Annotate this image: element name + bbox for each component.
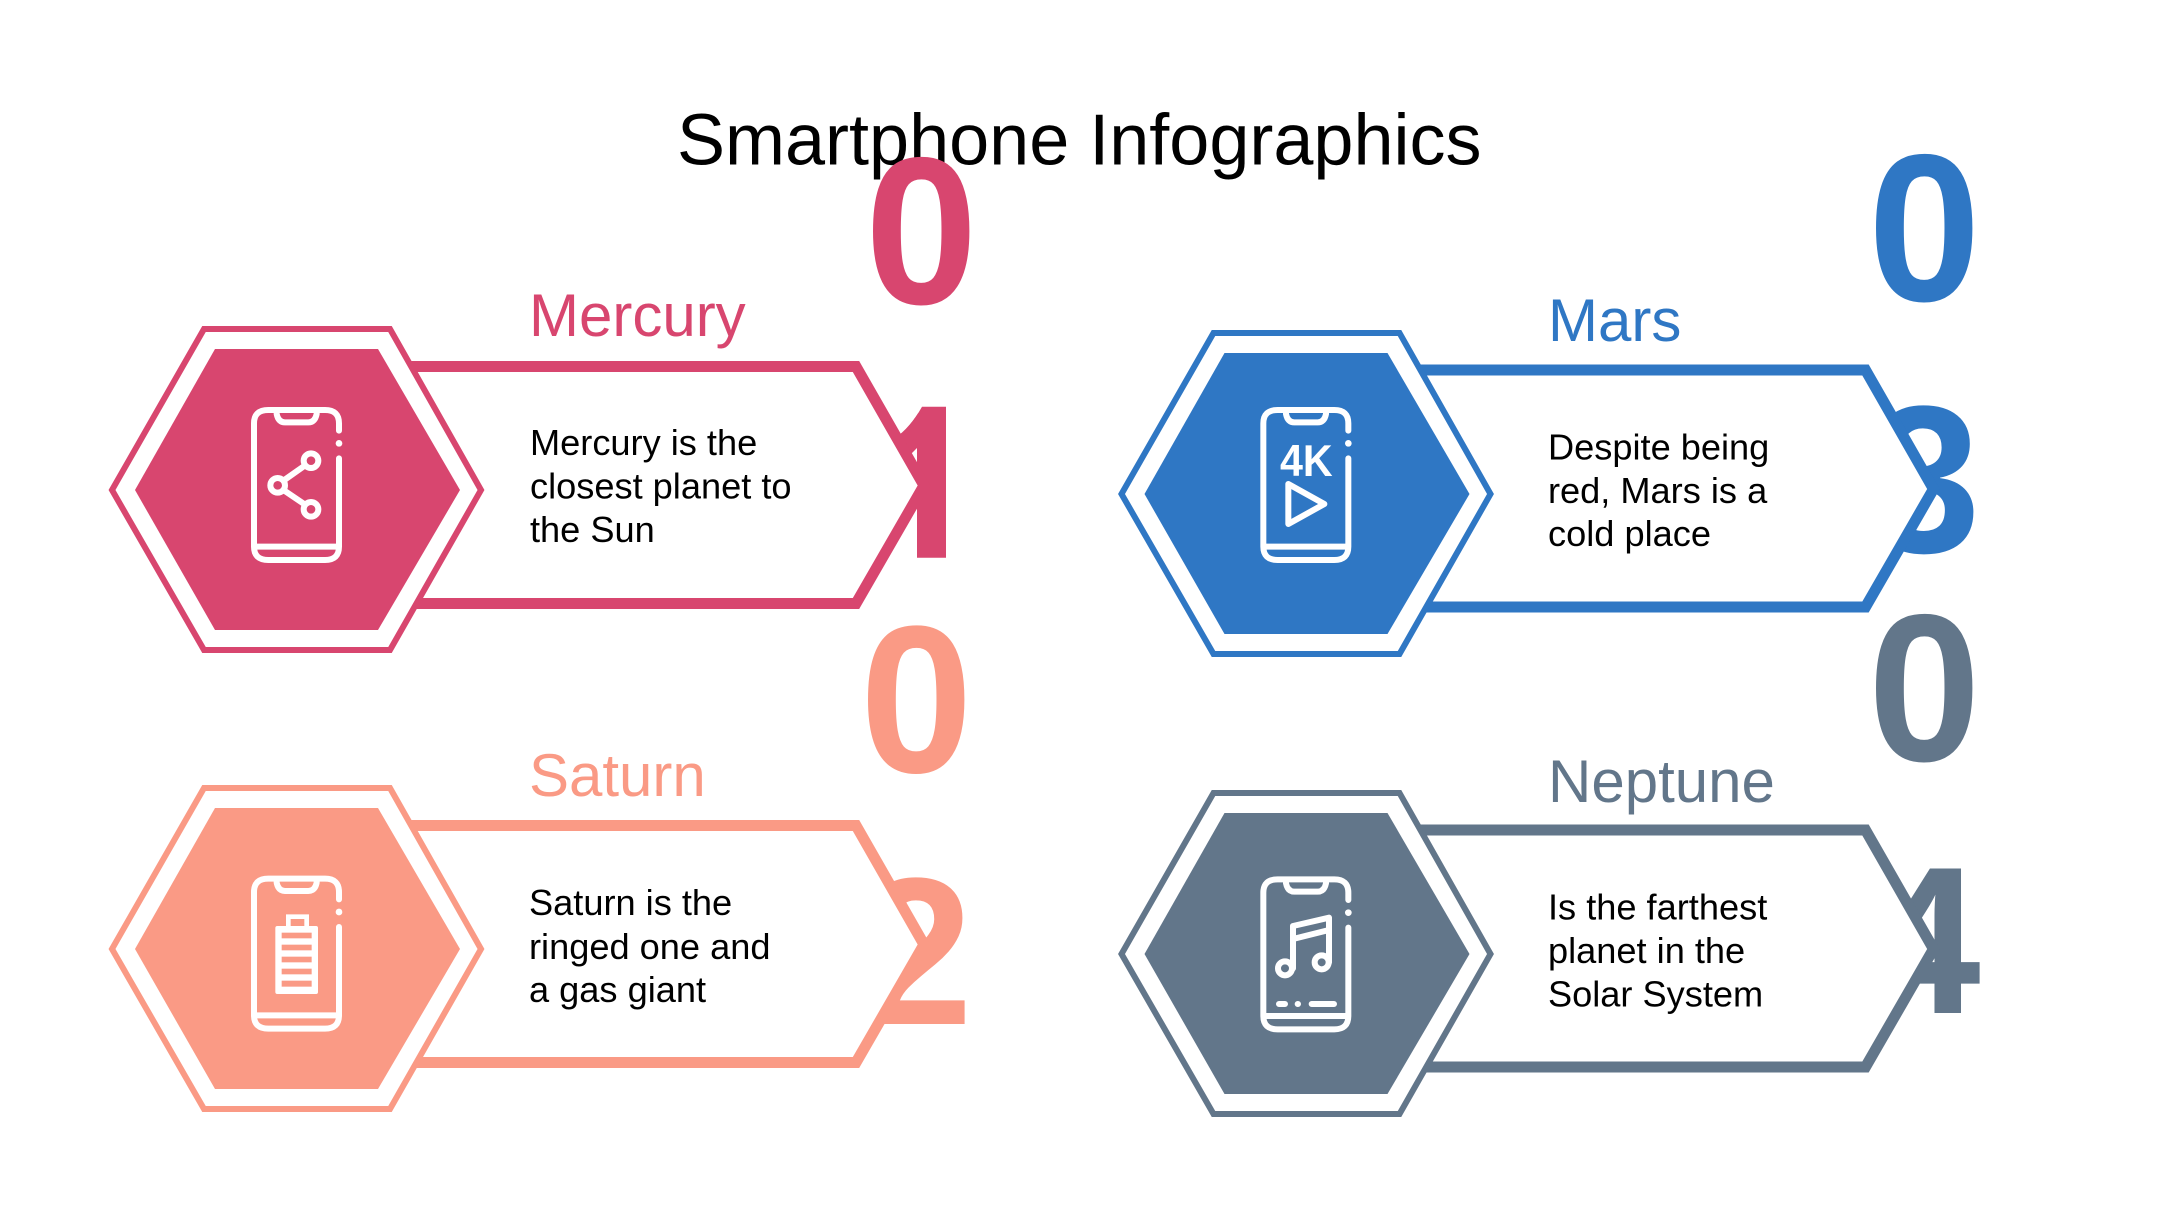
hexagon fill: Saturn (135, 808, 460, 1089)
hexagon outline: Mercury (112, 329, 481, 650)
description: Neptune: Solar System (1548, 974, 1763, 1015)
heading: Mercury: Mercury (529, 282, 746, 349)
number 03: 3 (1868, 362, 1981, 597)
hexagon outline: Mars (1122, 333, 1490, 654)
number 03: 0 (1868, 110, 1981, 346)
number 03 (1868, 110, 1981, 597)
description: Mars: red, Mars is a (1548, 470, 1768, 511)
heading: Neptune: Neptune (1548, 748, 1775, 815)
number 02: 0 (860, 582, 973, 817)
arrow: Saturn (380, 826, 924, 1062)
icon: phone with music note (1263, 879, 1352, 1029)
description: Mercury: Mercury is the (530, 422, 757, 463)
hexagon outline: Saturn (112, 788, 481, 1109)
number 01: 1 (868, 368, 985, 602)
description: Saturn: ringed one and (529, 926, 770, 967)
description: Saturn: Saturn is the (529, 882, 732, 923)
heading: Saturn: Saturn (529, 742, 706, 809)
panel: Saturn (112, 742, 924, 1109)
icon: phone with share symbol (254, 410, 342, 560)
arrow: Mercury (380, 366, 924, 604)
number 04 (1868, 570, 1981, 1058)
description: Mars: cold place (1548, 513, 1711, 554)
number 02 (860, 582, 973, 1069)
number 04: 4 (1868, 823, 1981, 1058)
description: Neptune: Is the farthest (1548, 887, 1767, 928)
icon: phone with 4K video (1263, 410, 1352, 560)
panel: Neptune (1122, 748, 1934, 1114)
arrow: Neptune (1389, 830, 1934, 1067)
number 04: 0 (1868, 570, 1981, 806)
title: Smartphone Infographics (677, 100, 1481, 180)
icon: phone with battery (254, 879, 342, 1029)
hexagon fill: Mars (1144, 353, 1470, 634)
icon: phone with 4K video: 4K (1280, 437, 1333, 486)
hexagon fill: Neptune (1144, 813, 1470, 1094)
description: Mercury: the Sun (530, 509, 655, 550)
arrow: Mars (1389, 370, 1934, 607)
number 02: 2 (860, 834, 973, 1069)
description: Mercury: closest planet to (530, 466, 792, 507)
description: Saturn: a gas giant (529, 969, 706, 1010)
hexagon outline: Neptune (1122, 793, 1490, 1114)
description: Neptune: planet in the (1548, 930, 1745, 971)
panel: Mercury (112, 282, 924, 650)
number 01: 0 (865, 114, 978, 348)
description: Mars: Despite being (1548, 427, 1769, 468)
number 01 (873, 156, 970, 558)
hexagon fill: Mercury (135, 349, 460, 630)
panel: Mars (1122, 287, 1934, 654)
heading: Mars: Mars (1548, 287, 1681, 354)
